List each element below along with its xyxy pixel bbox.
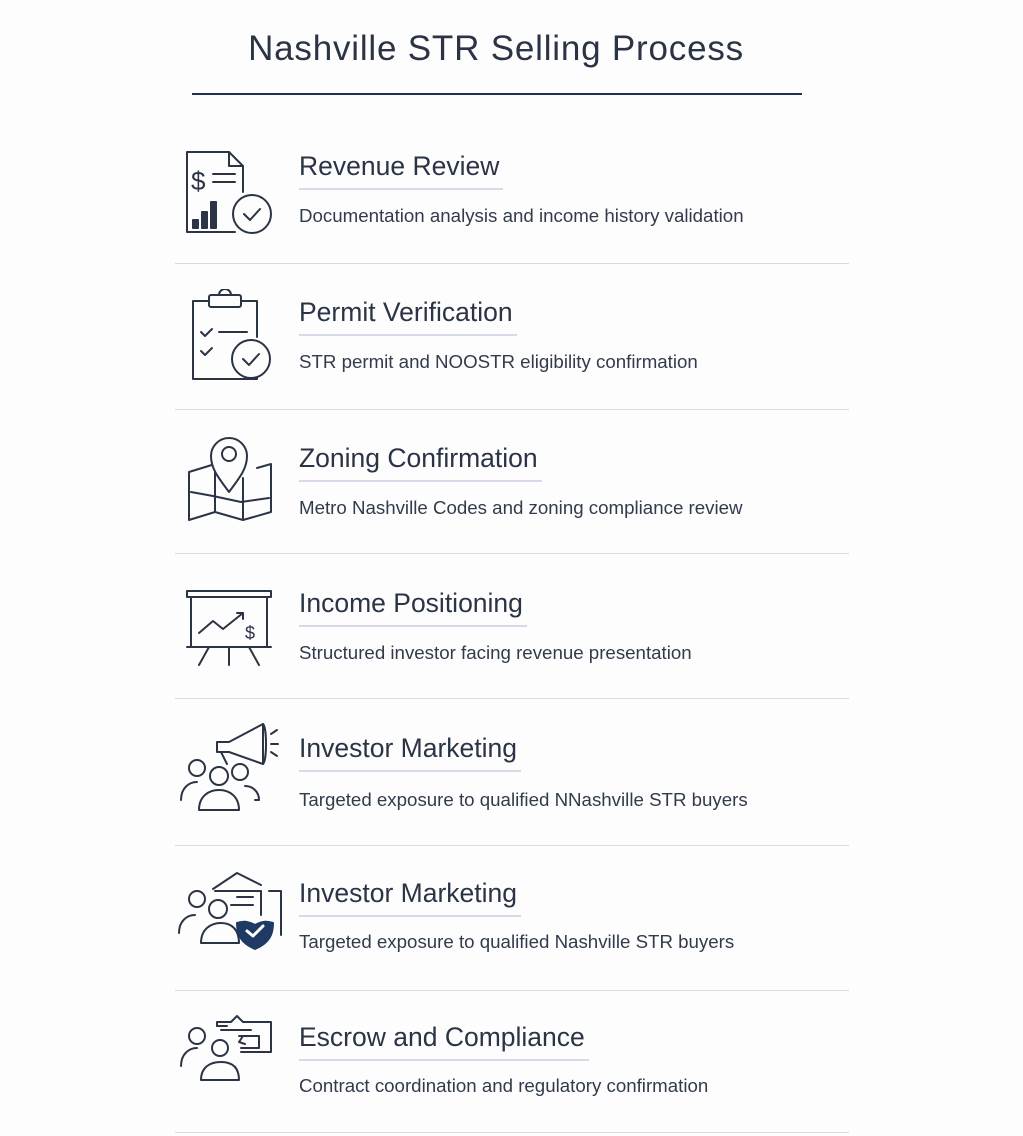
- row: zoning confirmation: [188, 437, 272, 521]
- icon: presentation board: [186, 590, 272, 666]
- row: revenue review: [186, 151, 272, 234]
- icon: document with chart and check: $: [191, 166, 206, 196]
- row: investor marketing 1: [180, 723, 279, 811]
- icon: people with shield: [178, 872, 282, 950]
- text: revenue review: Documentation analysis and income history validation: [299, 205, 744, 226]
- icon: clipboard: [192, 289, 271, 380]
- heading: revenue review: Revenue Review: [299, 151, 499, 181]
- icon: megaphone and people: [180, 723, 279, 811]
- text: investor marketing: Targeted exposure to qualified NNashville STR buyers: [299, 789, 748, 810]
- title: Nashville STR Selling Process: [248, 29, 744, 68]
- icon: presentation board: $: [245, 623, 255, 643]
- heading: escrow and compliance: Escrow and Compliance: [299, 1022, 585, 1052]
- heading: zoning confirmation: Zoning Confirmation: [299, 443, 538, 473]
- text: zoning confirmation: Metro Nashville Codes and zoning compliance review: [299, 497, 743, 518]
- icon: map pin: [188, 437, 272, 521]
- text: investor marketing: Targeted exposure to qualified Nashville STR buyers: [299, 931, 734, 952]
- icon: document with chart and check: [186, 151, 272, 234]
- heading: permit verification: Permit Verification: [299, 297, 513, 327]
- heading: investor marketing: Investor Marketing: [299, 878, 517, 908]
- text: permit verification: STR permit and NOOSTR eligibility confirmation: [299, 351, 698, 372]
- row: investor marketing 2: [178, 872, 282, 950]
- heading: income positioning: Income Positioning: [299, 588, 523, 618]
- row: escrow and compliance: [180, 1015, 272, 1081]
- row: income positioning: [186, 590, 272, 666]
- heading: investor marketing: Investor Marketing: [299, 733, 517, 763]
- icon: people with handshake: [180, 1015, 272, 1081]
- row: permit verification: [192, 289, 271, 380]
- text: income positioning: Structured investor facing revenue presentation: [299, 642, 692, 663]
- text: escrow and compliance: Contract coordination and regulatory confirmation: [299, 1075, 708, 1096]
